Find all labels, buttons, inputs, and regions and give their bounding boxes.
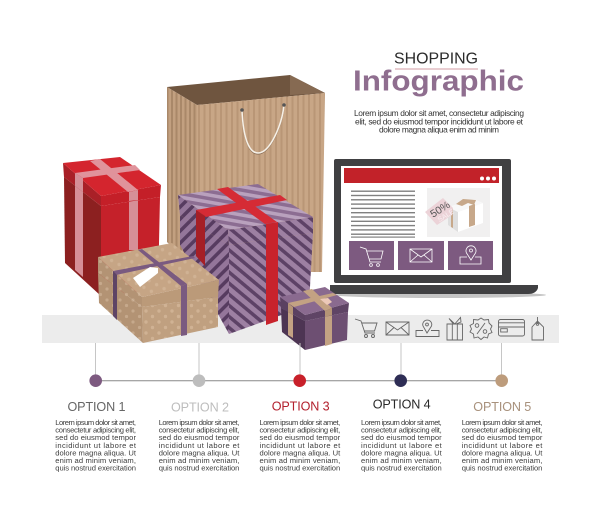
laptop bbox=[330, 159, 546, 298]
option 2: enim ad minim veniam, bbox=[159, 456, 239, 465]
option 5: incididunt ut labore et bbox=[462, 441, 543, 450]
marker 3 bbox=[293, 374, 306, 387]
option 1: Lorem ipsum dolor sit amet, bbox=[55, 418, 136, 427]
marker 2 bbox=[193, 374, 205, 387]
option 2: OPTION 2 bbox=[171, 400, 229, 414]
marker 4 bbox=[394, 374, 407, 387]
icon: percent badge bbox=[470, 318, 492, 340]
intro paragraph: elit, sed do eiusmod tempor incididunt ut labore et bbox=[355, 116, 524, 126]
sale tag bbox=[425, 198, 456, 225]
option 1: sed do eiusmod tempor bbox=[55, 433, 136, 442]
screen tile: envelope bbox=[398, 241, 444, 270]
purple ribbon bbox=[113, 249, 195, 336]
icon: location bbox=[416, 320, 439, 336]
option 4: quis nostrud exercitation bbox=[361, 464, 442, 473]
small purple gift box bbox=[280, 287, 349, 350]
laptop base bbox=[330, 285, 538, 294]
icon row bbox=[355, 317, 544, 340]
header bar bbox=[344, 168, 499, 183]
option 1: dolore magna aliqua. Ut bbox=[55, 448, 137, 457]
option 2: dolore magna aliqua. Ut bbox=[159, 448, 240, 457]
bag handle bbox=[240, 103, 286, 154]
intro paragraph: dolore magna aliqua enim ad minim bbox=[379, 125, 499, 135]
option 5: quis nostrud exercitation bbox=[462, 464, 542, 473]
sale image bbox=[425, 188, 490, 237]
option 3: quis nostrud exercitation bbox=[260, 464, 340, 473]
laptop shadow bbox=[334, 292, 546, 298]
option 4: OPTION 4 bbox=[373, 397, 431, 411]
option 2 bbox=[159, 400, 240, 473]
laptop screen frame bbox=[334, 159, 511, 283]
tan polka-dot gift box bbox=[98, 243, 219, 343]
laptop display bbox=[341, 166, 502, 275]
purple striped gift box bbox=[178, 184, 313, 334]
gift tag bbox=[133, 267, 158, 287]
option 4: incididunt ut labore et bbox=[361, 441, 443, 450]
band: grey icon strip bbox=[42, 315, 559, 343]
marker 5 bbox=[495, 374, 508, 387]
option 4: enim ad minim veniam, bbox=[361, 456, 442, 465]
option 4: sed do eiusmod tempor bbox=[361, 433, 442, 442]
option 4: dolore magna aliqua. Ut bbox=[361, 448, 443, 457]
option 3: Lorem ipsum dolor sit amet, bbox=[260, 418, 340, 427]
option 1: OPTION 1 bbox=[68, 400, 126, 414]
option 3: incididunt ut labore et bbox=[260, 441, 341, 450]
option 5: consectetur adipiscing elit, bbox=[462, 426, 542, 435]
icon: envelope bbox=[386, 322, 409, 335]
timeline bbox=[89, 343, 508, 387]
option 1: incididunt ut labore et bbox=[55, 441, 137, 450]
sale tag: 50% bbox=[428, 199, 452, 220]
intro paragraph: Lorem ipsum dolor sit amet, consectetur adipiscing bbox=[354, 108, 524, 118]
intro paragraph bbox=[354, 108, 524, 135]
option 5: enim ad minim veniam, bbox=[462, 456, 542, 465]
title: infographic: Infographic bbox=[353, 66, 524, 98]
screen tile: cart bbox=[349, 241, 394, 270]
option 2: sed do eiusmod tempor bbox=[159, 433, 240, 442]
title: shopping: SHOPPING bbox=[394, 50, 478, 68]
option 2: incididunt ut labore et bbox=[159, 441, 240, 450]
option 5: dolore magna aliqua. Ut bbox=[462, 448, 543, 457]
option 1: enim ad minim veniam, bbox=[55, 456, 136, 465]
option 3: consectetur adipiscing elit, bbox=[260, 426, 340, 435]
red gift box bbox=[63, 157, 161, 296]
option 3 bbox=[260, 400, 341, 473]
option 2: Lorem ipsum dolor sit amet, bbox=[159, 418, 239, 427]
option 4: Lorem ipsum dolor sit amet, bbox=[361, 418, 442, 427]
option 3: sed do eiusmod tempor bbox=[260, 433, 341, 442]
title bbox=[353, 50, 524, 98]
option 4: consectetur adipiscing elit, bbox=[361, 426, 442, 435]
option 4 bbox=[361, 397, 443, 473]
option 2: quis nostrud exercitation bbox=[159, 464, 239, 473]
option 5: OPTION 5 bbox=[473, 400, 531, 414]
option 5: sed do eiusmod tempor bbox=[462, 433, 543, 442]
option 3: OPTION 3 bbox=[272, 400, 330, 414]
shopping bag bbox=[167, 75, 325, 272]
marker 1 bbox=[89, 374, 102, 387]
sale tag: SALE bbox=[437, 208, 456, 224]
screen tile: location bbox=[448, 241, 493, 270]
red ribbon bbox=[196, 187, 287, 325]
option 3: dolore magna aliqua. Ut bbox=[260, 448, 341, 457]
option 5 bbox=[462, 400, 543, 473]
option 1: consectetur adipiscing elit, bbox=[55, 426, 136, 435]
icon: credit card bbox=[498, 320, 524, 336]
icon: gift bbox=[447, 318, 462, 340]
text placeholder lines bbox=[351, 190, 415, 238]
icon: price tag bbox=[532, 317, 544, 340]
option 2: consectetur adipiscing elit, bbox=[159, 426, 239, 435]
option 1 bbox=[55, 400, 137, 473]
option 5: Lorem ipsum dolor sit amet, bbox=[462, 418, 542, 427]
option 3: enim ad minim veniam, bbox=[260, 456, 340, 465]
icon: cart bbox=[355, 319, 377, 338]
option 1: quis nostrud exercitation bbox=[55, 464, 136, 473]
